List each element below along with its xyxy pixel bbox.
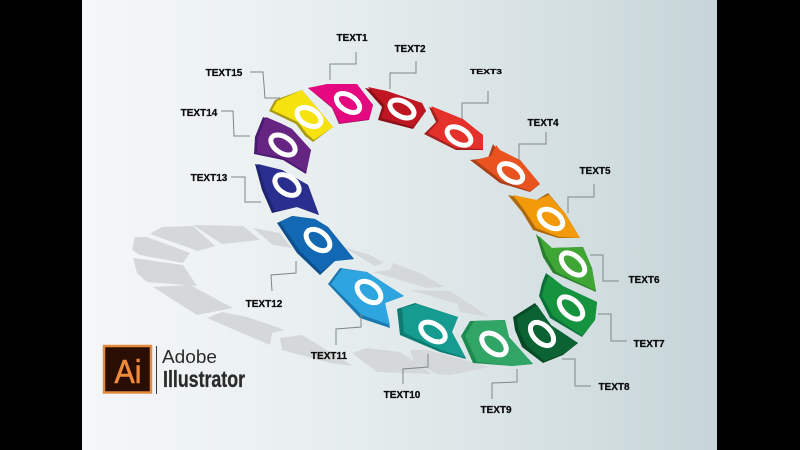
text labels: TEXT13 [191, 173, 228, 184]
icon: Ai square [104, 346, 151, 392]
text labels: TEXT1 [336, 33, 368, 44]
segment 14: purple [254, 117, 311, 174]
segment 4: orange red [470, 144, 540, 192]
segment 1: magenta [308, 84, 373, 124]
text labels: TEXT15 [206, 68, 243, 79]
segment 6: green [536, 234, 596, 292]
segment 7: mid green [539, 273, 597, 337]
icon: Ai square: Ai [114, 353, 142, 390]
text labels: TEXT6 [628, 275, 660, 286]
segment 9: sea green [461, 320, 533, 366]
text labels: TEXT2 [394, 44, 426, 55]
segment 8: dark green [513, 303, 578, 363]
text labels: TEXT5 [579, 166, 611, 177]
text labels: TEXT10 [384, 390, 421, 401]
leader lines [221, 52, 627, 399]
segment 13: navy [255, 164, 319, 215]
segment 15: yellow [269, 90, 333, 142]
text labels: TEXT12 [246, 299, 283, 310]
text labels: TEXT8 [598, 382, 630, 393]
segment 3: red [424, 106, 483, 150]
logo: Adobe Illustrator [104, 346, 245, 394]
segment 11: light blue [328, 268, 404, 328]
logo wordmark [162, 346, 245, 392]
logo wordmark: Adobe [162, 346, 217, 367]
text labels: TEXT11 [311, 351, 347, 362]
segment 2: dark red [365, 87, 426, 129]
segment 12: blue [277, 216, 354, 275]
text labels [181, 33, 665, 416]
text labels: TEXT3 [470, 69, 502, 76]
logo divider [156, 346, 157, 394]
ring of segments [254, 84, 597, 366]
text labels: TEXT4 [527, 118, 559, 129]
text labels: TEXT14 [181, 108, 218, 119]
segment 5: orange [508, 193, 580, 238]
text labels: TEXT7 [633, 339, 665, 350]
text labels: TEXT9 [480, 405, 512, 416]
background panel [82, 0, 717, 450]
segment 10: teal [397, 303, 466, 359]
logo wordmark: Illustrator [163, 366, 245, 392]
ground shadow ring [132, 225, 490, 375]
